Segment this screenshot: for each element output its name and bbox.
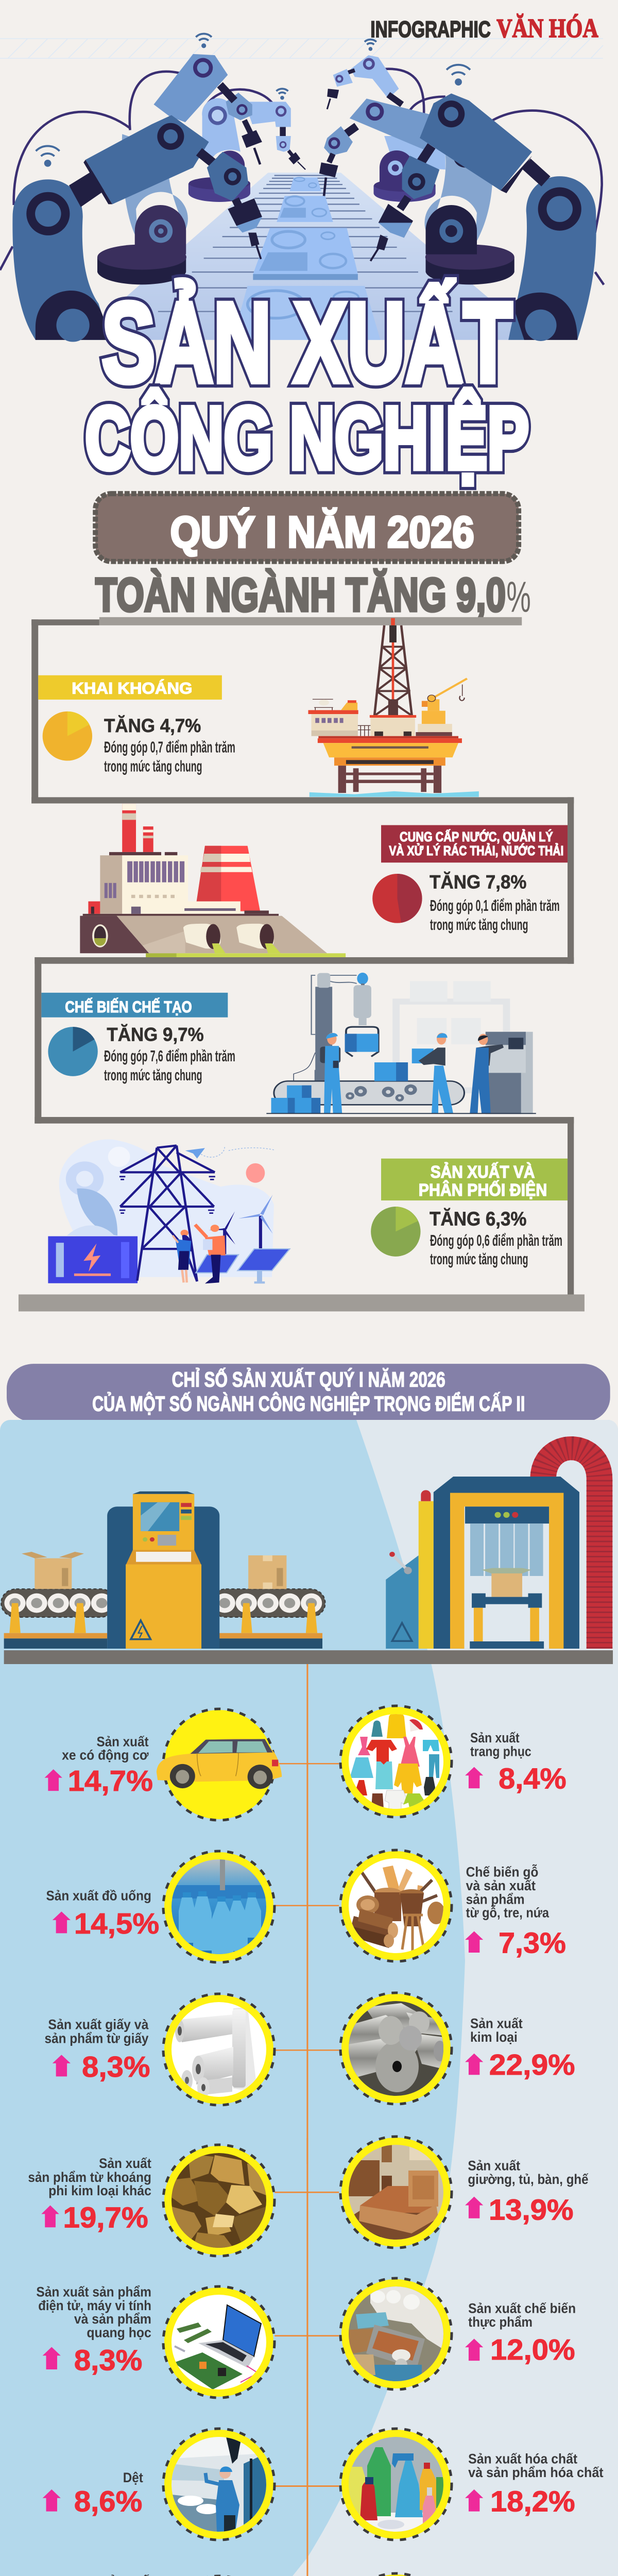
- left conveyor: [1, 1552, 115, 1649]
- circle: furniture: [340, 2137, 452, 2248]
- item: textile labels: 8,6%: [74, 2486, 142, 2518]
- stats text: trong mức tăng chung: [430, 1250, 528, 1268]
- wires: [0, 69, 604, 285]
- stats text: [430, 1208, 562, 1268]
- item: minerals labels: Sản xuất: [99, 2156, 151, 2171]
- sector: sản xuất và phân phối điện: [48, 1139, 568, 1283]
- item: food labels: [465, 2301, 576, 2366]
- item: chemicals labels: Sản xuất hóa chất: [468, 2451, 577, 2466]
- circle: metal: [340, 1993, 452, 2104]
- man: [195, 1225, 226, 1283]
- item: food labels: 12,0%: [490, 2334, 575, 2366]
- icon: power tower, solar and wind: [48, 1139, 289, 1283]
- circle: paper: [163, 1994, 274, 2105]
- stats text: TĂNG 6,3%: [430, 1208, 526, 1230]
- circle: fabricated metal: [340, 2573, 452, 2576]
- panel: industry background: [0, 1420, 618, 2576]
- panel: four sector frame: [19, 617, 585, 1311]
- section heading: chỉ số sản xuất quý I: [7, 1364, 610, 1422]
- pie: [43, 711, 92, 761]
- text: xe có động cơ: 14,7%: [68, 1765, 153, 1798]
- sector: khai khoáng: [38, 618, 479, 797]
- stats text: [430, 871, 560, 934]
- badge: quý I năm 2026: QUÝ I NĂM 2026: [170, 507, 474, 557]
- item: furniture labels: [465, 2158, 589, 2226]
- sector: khai khoáng: Đóng góp 0,7 điểm phần trăm: [104, 738, 235, 756]
- worker middle: [412, 1033, 453, 1114]
- icon: oil rig: [308, 618, 479, 797]
- item: textile labels: Dệt: [123, 2470, 143, 2485]
- title: SẢN XUẤT CÔNG NGHIỆP: [85, 279, 529, 487]
- sector: chế biến chế tạo: [41, 973, 536, 1114]
- right conveyor: [211, 1555, 325, 1649]
- item: clothing labels: 8,4%: [499, 1763, 566, 1795]
- sector: chế biến chế tạo: Đóng góp 7,6 điểm phần trăm: [104, 1047, 235, 1065]
- stats text: trong mức tăng chung: [104, 1066, 202, 1084]
- badge: quý I năm 2026: [95, 494, 519, 562]
- item: textile labels: [43, 2470, 143, 2518]
- item: wood labels: Chế biến gỗ: [466, 1864, 538, 1880]
- item: metal labels: Sản xuất: [470, 2016, 523, 2031]
- circle: electronics: [163, 2286, 274, 2398]
- circle: wood: [340, 1850, 452, 1961]
- pie: [372, 874, 422, 923]
- item: wood labels: 7,3%: [499, 1927, 566, 1959]
- brand logo top: INFOGRAPHIC: [370, 17, 491, 42]
- item: electronics labels: [36, 2284, 151, 2377]
- brand logo top: [370, 13, 598, 43]
- worker right: [470, 1034, 504, 1114]
- text: xe có động cơ: [44, 1734, 282, 1798]
- item: clothing labels: trang phục: [470, 1744, 531, 1759]
- robot: big right arm: [370, 93, 596, 341]
- machine ground bar: [4, 1650, 613, 1664]
- label band: KHAI KHOÁNG: [72, 679, 192, 698]
- header illustration: robot arms and conveyor: [0, 34, 604, 342]
- item: furniture labels: 13,9%: [489, 2194, 574, 2226]
- robot: upper left arm: [153, 54, 234, 122]
- robot: back centre-left: [188, 93, 305, 202]
- item: minerals labels: 19,7%: [63, 2202, 148, 2234]
- circle: food processing: [340, 2278, 452, 2389]
- circle: beverages: [163, 1851, 274, 1962]
- circle: car: [163, 1709, 274, 1820]
- item: electronics labels: điện tử, máy vi tính: [38, 2298, 151, 2313]
- sector: cung cấp nước: [80, 804, 568, 957]
- circle: textile: [163, 2429, 274, 2540]
- item: food labels: Sản xuất chế biến: [468, 2301, 576, 2316]
- machine console: [107, 1492, 219, 1649]
- connector lines: [274, 1664, 339, 2576]
- stats text: trong mức tăng chung: [104, 757, 202, 775]
- item: clothing labels: Sản xuất: [470, 1730, 520, 1745]
- item: food labels: thực phẩm: [468, 2314, 533, 2330]
- wifi icons: [36, 34, 470, 167]
- robot: back right base: [424, 144, 514, 284]
- item: wood labels: sản phẩm: [466, 1892, 525, 1907]
- label band: CHẾ BIẾN CHẾ TẠO: [65, 997, 192, 1016]
- label band: SẢN XUẤT VÀ: [431, 1162, 535, 1182]
- label band: [381, 1159, 568, 1200]
- item: paper labels: [44, 2017, 150, 2083]
- circle: clothing: [340, 1706, 452, 1817]
- item: furniture labels: Sản xuất: [468, 2158, 520, 2173]
- conveyor: [77, 173, 538, 340]
- worker left: [320, 1033, 342, 1114]
- item: minerals labels: sản phẩm từ khoáng: [28, 2170, 151, 2185]
- item: clothing labels: [465, 1730, 566, 1795]
- section heading: chỉ số sản xuất quý I: CHỈ SỐ SẢN XUẤT QUÝ I NĂM 2026: [172, 1367, 445, 1392]
- item: wood labels: từ gỗ, tre, nứa: [466, 1905, 549, 1921]
- item: paper labels: Sản xuất giấy và: [48, 2017, 149, 2032]
- item: electronics labels: quang học: [87, 2325, 151, 2340]
- stats text: [104, 715, 235, 775]
- truss: [0, 39, 603, 58]
- item: metal labels: 22,9%: [489, 2049, 575, 2081]
- icon: yellow car: [157, 1739, 282, 1789]
- robot: back left base: [97, 134, 188, 284]
- text: xe có động cơ: Sản xuất: [96, 1734, 149, 1750]
- press machine: [386, 1448, 599, 1649]
- item: metal labels: kim loại: [470, 2029, 518, 2045]
- stats text: TĂNG 7,8%: [430, 871, 526, 893]
- woman: [173, 1230, 192, 1282]
- item: electronics labels: Sản xuất sản phẩm: [36, 2284, 151, 2299]
- robot: big left arm: [12, 115, 262, 342]
- item: paper labels: sản phẩm từ giấy: [44, 2031, 149, 2046]
- item: beverages labels: [46, 1888, 159, 1940]
- item: electronics labels: và sản phẩm: [74, 2311, 151, 2327]
- label band: PHÂN PHỐI ĐIỆN: [419, 1180, 547, 1200]
- item: minerals labels: [28, 2156, 151, 2234]
- circle: chemicals: [340, 2429, 452, 2540]
- pie: [371, 1207, 421, 1257]
- item: metal labels: [465, 2016, 575, 2081]
- item: wood labels: [465, 1864, 566, 1959]
- item: chemicals labels: [465, 2451, 604, 2518]
- icon: factory workers and conveyor: [266, 973, 536, 1114]
- stats text: [104, 1024, 235, 1084]
- item: furniture labels: giường, tủ, bàn, ghế: [468, 2172, 589, 2187]
- item: beverages labels: 14,5%: [74, 1908, 159, 1940]
- label band: [381, 825, 568, 862]
- headline: toàn ngành tăng 9,0%: %: [506, 573, 531, 621]
- stats text: TĂNG 9,7%: [107, 1024, 204, 1045]
- label band: CUNG CẤP NƯỚC, QUẢN LÝ: [400, 829, 553, 844]
- icon: power and waste plant: [80, 804, 346, 957]
- circle: non-metallic minerals: [163, 2145, 274, 2256]
- robot: upper right arm: [319, 55, 445, 202]
- item: electronics labels: 8,3%: [74, 2345, 142, 2377]
- item: beverages labels: Sản xuất đồ uống: [46, 1888, 151, 1904]
- item: paper labels: 8,3%: [82, 2051, 150, 2083]
- text: xe có động cơ: xe có động cơ: [62, 1748, 149, 1763]
- label band: [38, 675, 222, 700]
- label band: [41, 993, 228, 1018]
- item: chemicals labels: 18,2%: [490, 2486, 575, 2518]
- illustration: packaging machine: [1, 1448, 599, 1649]
- stats text: TĂNG 4,7%: [104, 715, 201, 736]
- pie: [48, 1027, 98, 1076]
- item: minerals labels: phi kim loại khác: [48, 2183, 151, 2198]
- item: wood labels: và sản xuất: [466, 1878, 536, 1893]
